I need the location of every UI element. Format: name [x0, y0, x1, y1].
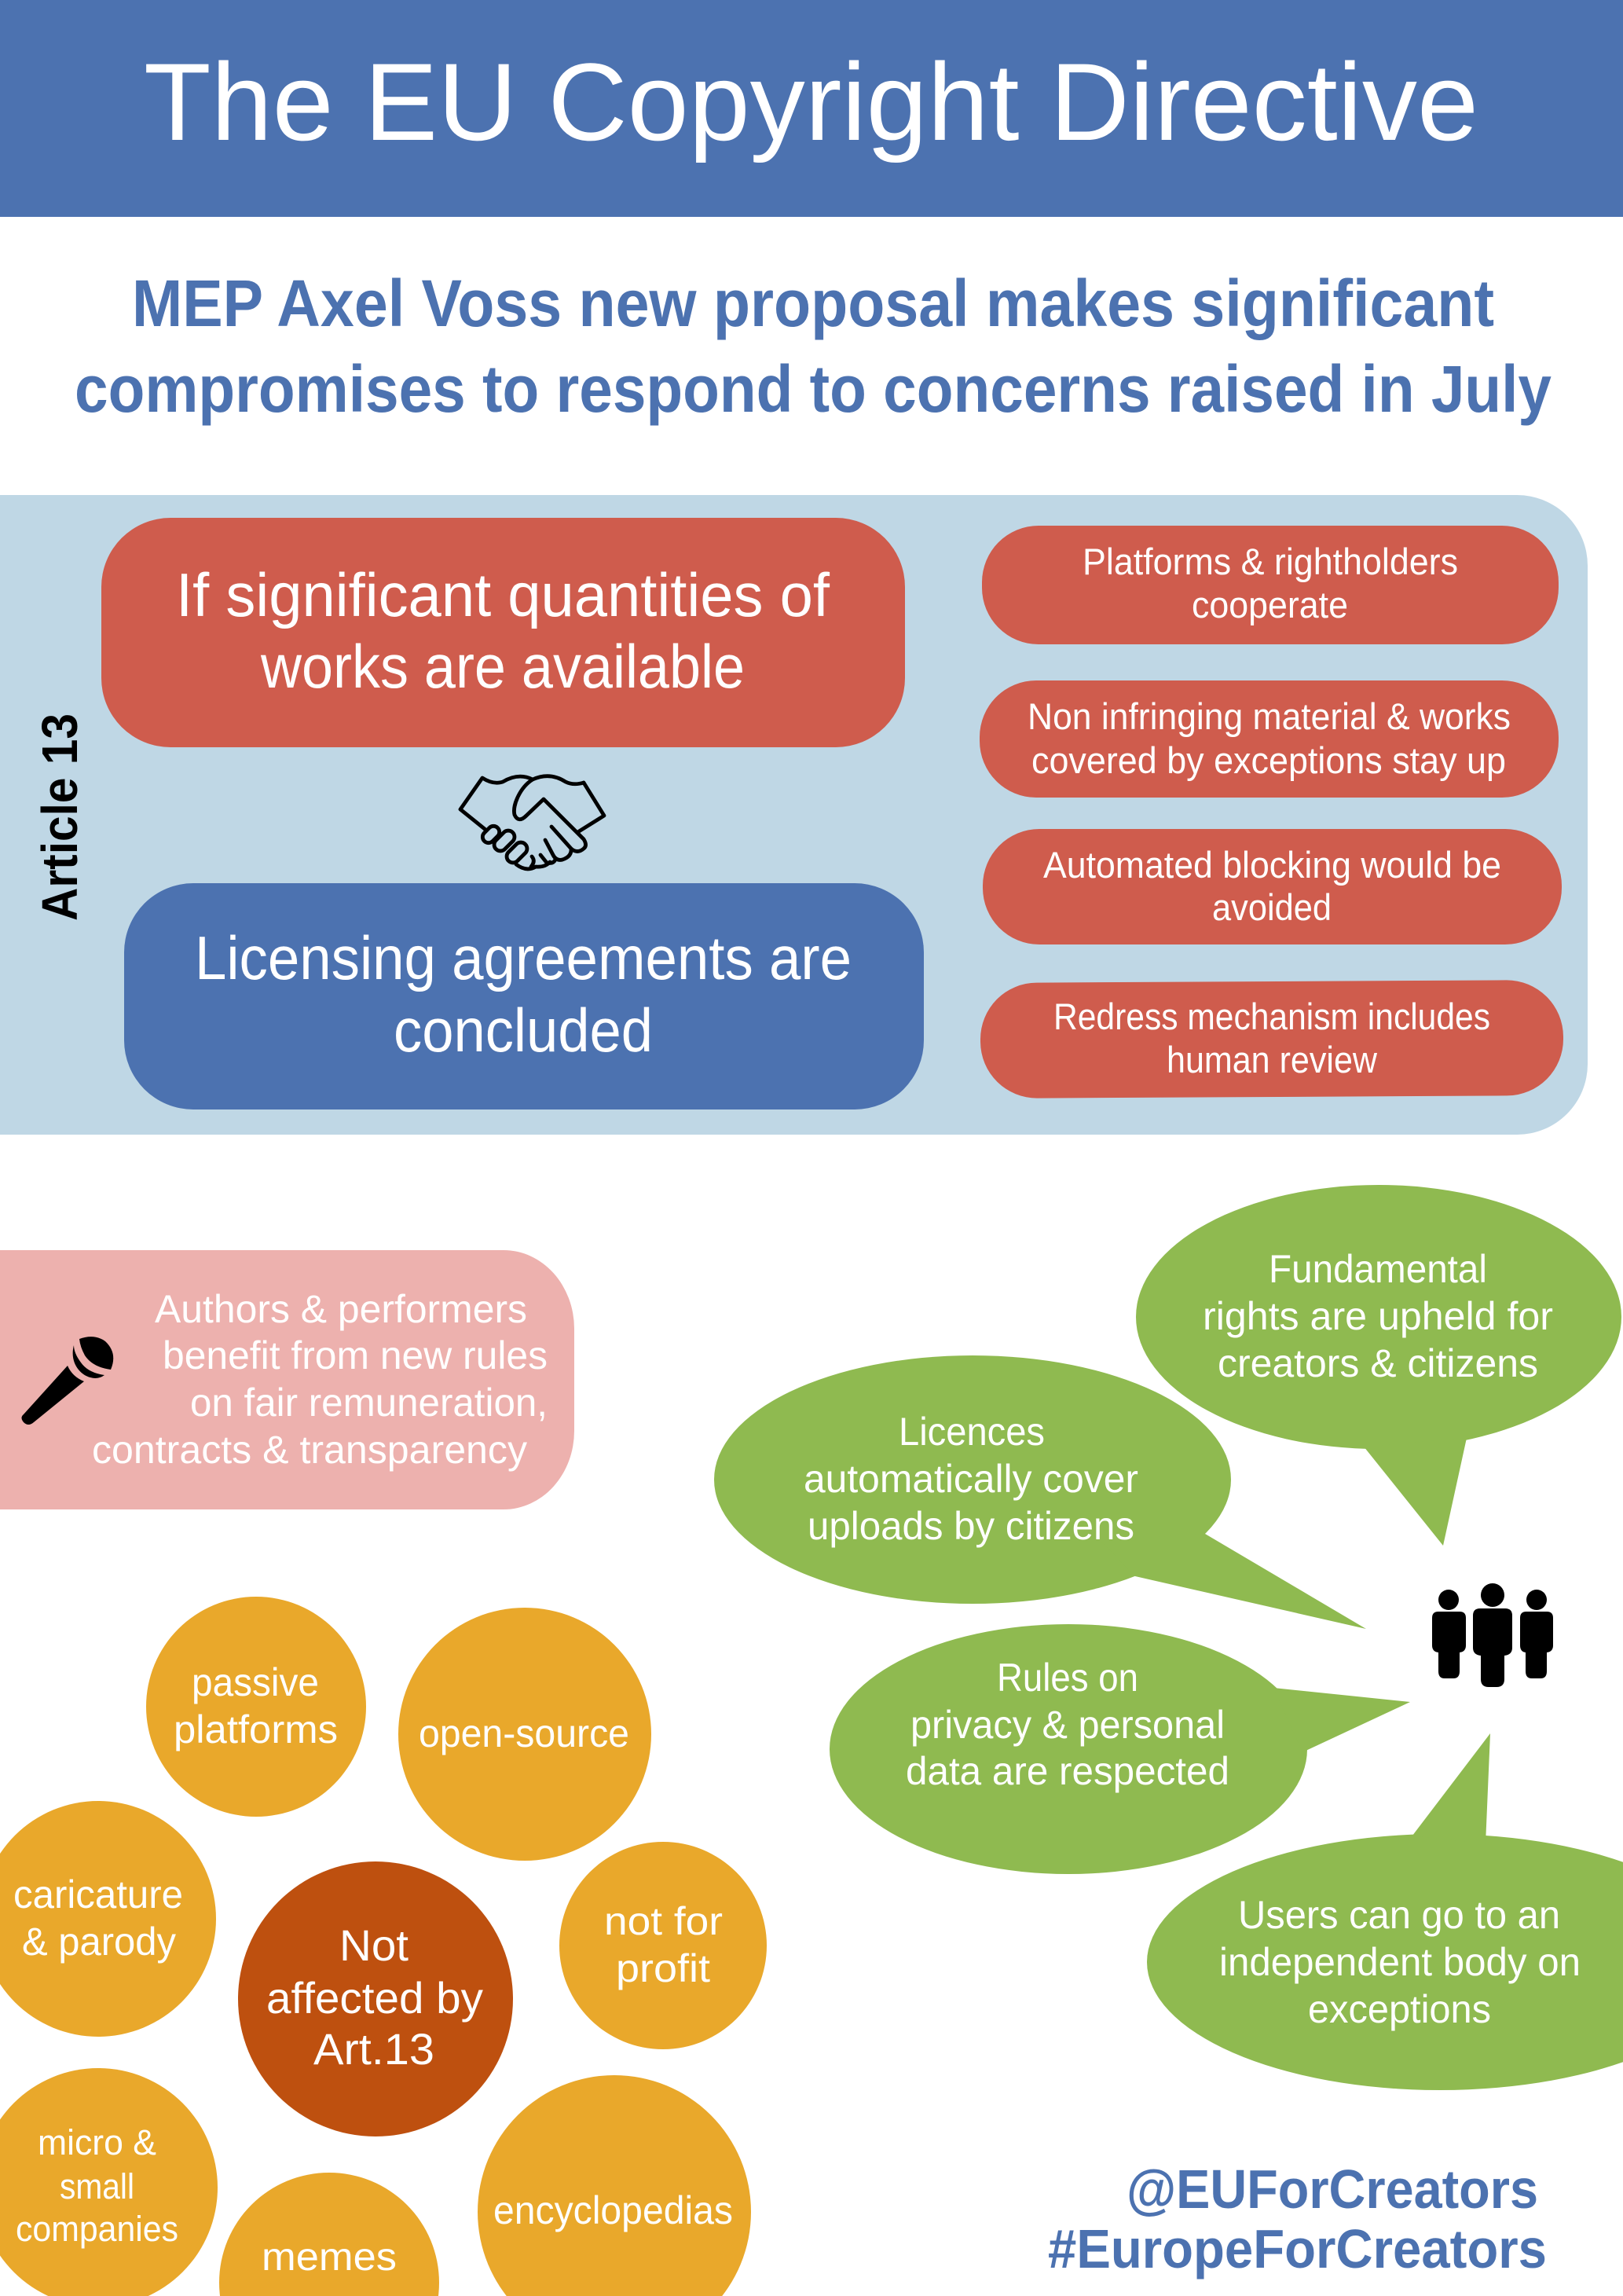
social handles: @EUForCreators — [1127, 2158, 1538, 2220]
circle: encyclopedias: encyclopedias — [493, 2188, 733, 2232]
label: Article 13: Article 13 — [31, 713, 88, 921]
text: authors and performers — [92, 1287, 548, 1472]
circle: not affected by Art.13: Art.13 — [313, 2024, 434, 2074]
pill: platforms and rightholders: Platforms & rightholders — [1083, 541, 1458, 582]
text: authors and performers: Authors & performers — [155, 1287, 527, 1331]
circle: memes — [219, 2173, 439, 2296]
pill: automated blocking: Automated blocking would be — [1043, 844, 1501, 886]
circle: not affected by Art.13: Not — [339, 1920, 408, 1970]
circle: micro and small companies — [0, 2068, 218, 2296]
circle: caricature and parody — [0, 1801, 216, 2037]
circle: passive platforms — [146, 1597, 366, 1817]
circle: passive platforms: platforms — [174, 1707, 338, 1751]
subtitle — [75, 266, 1552, 426]
condition box: significant quantities — [101, 518, 905, 747]
text: authors and performers: on fair remuneration, — [190, 1381, 548, 1425]
pill: non infringing material: covered by exceptions stay up — [1031, 739, 1506, 781]
circle: not for profit — [559, 1842, 767, 2049]
panel: authors and performers — [0, 1250, 574, 1509]
speech bubble: privacy: privacy & personal — [910, 1703, 1225, 1747]
panel: Article 13 — [0, 495, 1588, 1135]
result box: licensing agreements — [124, 883, 924, 1109]
circle: not for profit: profit — [616, 1946, 710, 1990]
circle: not affected by Art.13 — [238, 1861, 513, 2136]
speech bubble: privacy: Rules on — [997, 1656, 1138, 1700]
speech bubble: independent body: independent body on — [1219, 1940, 1581, 1984]
pill: redress mechanism — [980, 980, 1563, 1098]
circle: not for profit: not for — [604, 1899, 723, 1943]
icon: group of people — [1432, 1583, 1553, 1687]
icon: handshake — [460, 776, 604, 869]
circle: micro and small companies: small — [60, 2166, 134, 2206]
speech bubble: independent body — [1147, 1733, 1623, 2090]
speech bubble: licences: Licences — [899, 1410, 1045, 1454]
circle: open-source — [398, 1608, 651, 1861]
speech bubble: privacy: data are respected — [906, 1749, 1229, 1793]
icon: microphone — [22, 1337, 113, 1425]
speech bubble: licences: uploads by citizens — [808, 1504, 1134, 1548]
circle: micro and small companies: companies — [16, 2209, 178, 2249]
circle: caricature and parody: caricature — [13, 1872, 183, 1916]
speech bubble: fundamental rights — [1136, 1185, 1621, 1546]
circle: encyclopedias — [478, 2075, 751, 2296]
condition box: significant quantities: If significant quantities of — [176, 560, 830, 629]
subtitle: MEP Axel Voss new proposal makes significant — [132, 266, 1494, 340]
pill: non infringing material — [980, 680, 1559, 798]
pill: redress mechanism: Redress mechanism includes — [1053, 996, 1490, 1037]
condition box: significant quantities: works are available — [260, 632, 745, 701]
pill: platforms and rightholders: cooperate — [1192, 584, 1348, 625]
social handles — [1048, 2158, 1547, 2279]
social handles: #EuropeForCreators — [1048, 2218, 1547, 2279]
pill: automated blocking: avoided — [1212, 886, 1332, 928]
circle: open-source: open-source — [419, 1711, 629, 1755]
title banner — [0, 0, 1623, 217]
circle: caricature and parody: & parody — [22, 1920, 176, 1964]
result box: licensing agreements: Licensing agreements are — [195, 923, 852, 992]
pill: non infringing material: Non infringing material & works — [1028, 695, 1511, 737]
speech bubble: fundamental rights: rights are upheld for — [1203, 1294, 1553, 1338]
speech bubble: privacy — [830, 1624, 1410, 1874]
circle: memes: memes — [262, 2235, 397, 2279]
circle: passive platforms: passive — [192, 1660, 319, 1704]
pill: automated blocking — [983, 829, 1562, 944]
text: authors and performers: contracts & transparency — [92, 1428, 527, 1472]
result box: licensing agreements: concluded — [394, 996, 653, 1065]
text: authors and performers: benefit from new rules — [163, 1333, 548, 1377]
circle: micro and small companies: micro & — [38, 2122, 156, 2162]
speech bubble: licences: automatically cover — [804, 1457, 1138, 1501]
circle: not affected by Art.13: affected by — [266, 1973, 483, 2023]
speech bubble: fundamental rights: creators & citizens — [1218, 1341, 1538, 1385]
speech bubble: fundamental rights: Fundamental — [1269, 1247, 1487, 1291]
pill: platforms and rightholders — [982, 526, 1559, 644]
pill: redress mechanism: human review — [1167, 1039, 1378, 1080]
speech bubble: independent body: Users can go to an — [1238, 1893, 1560, 1937]
speech bubble: licences — [714, 1355, 1366, 1629]
speech bubble: independent body: exceptions — [1308, 1987, 1491, 2031]
title banner: The EU Copyright Directive — [144, 40, 1478, 163]
